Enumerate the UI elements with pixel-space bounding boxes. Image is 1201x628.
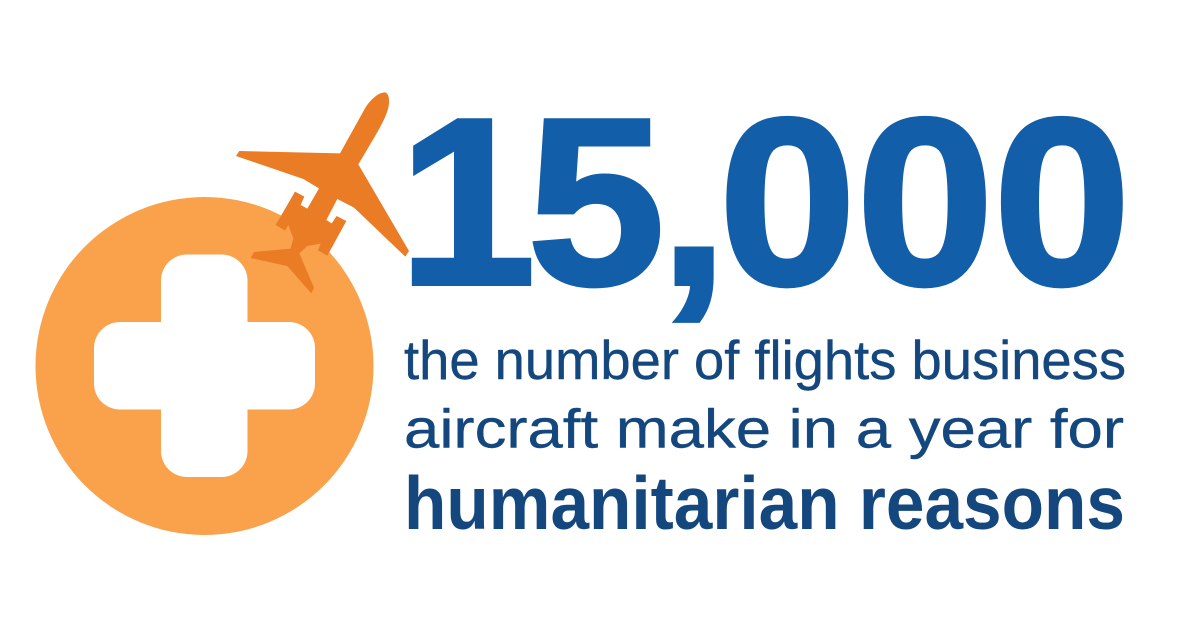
big number: 15,000: [398, 69, 1131, 335]
icon: medical cross in circle: [36, 197, 374, 535]
icon: airplane: [236, 92, 409, 293]
line 3: emphasis: humanitarian reasons: [404, 461, 1125, 545]
description text: [404, 329, 1126, 545]
line 2: aircraft make in a year for: [404, 398, 1124, 460]
line 1: the number of flights business: [404, 329, 1126, 391]
